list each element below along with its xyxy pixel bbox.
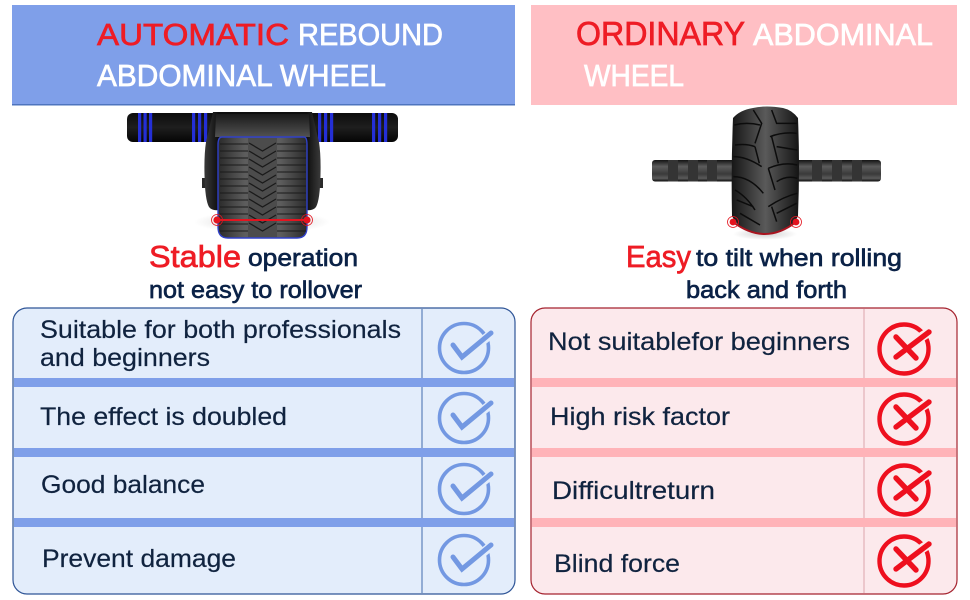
product image: automatic rebound wheel (127, 112, 398, 238)
caption: stable operation (149, 239, 362, 304)
icon: cross mark 1 (880, 324, 929, 374)
icon: cross mark 2 (880, 394, 929, 444)
header: ordinary abdominal wheel: ABDOMINAL (753, 17, 933, 52)
caption: easy to tilt: back and forth (686, 277, 847, 304)
row: prevent damage: Prevent damage (42, 545, 236, 573)
icon: check mark 1 (440, 324, 491, 372)
icon: check mark 3 (440, 464, 491, 514)
panel: automatic wheel benefits (13, 308, 515, 594)
row: difficult return: Difficultreturn (552, 477, 715, 505)
product image: ordinary wheel (652, 106, 881, 240)
caption: stable operation: not easy to rollover (149, 277, 362, 304)
caption: easy to tilt: Easy (626, 239, 691, 274)
side knobs (202, 178, 323, 188)
header: ordinary abdominal wheel: WHEEL (584, 58, 684, 93)
header: automatic rebound abdominal wheel: ABDOMINAL WHEEL (97, 58, 386, 93)
panel: ordinary wheel drawbacks (531, 308, 957, 594)
header: automatic rebound abdominal wheel: REBOUND (298, 17, 443, 52)
caption: easy to tilt (626, 239, 902, 304)
row: suitable for both (40, 316, 401, 372)
caption: easy to tilt: to tilt when rolling (696, 245, 902, 272)
row: the effect is doubled: The effect is doubled (40, 403, 287, 431)
row: suitable for both: Suitable for both professionals (40, 316, 401, 344)
caption: stable operation: operation (248, 245, 358, 272)
caption: stable operation: Stable (149, 239, 241, 274)
row: high risk factor: High risk factor (550, 403, 730, 431)
row: good balance: Good balance (41, 471, 205, 499)
header: ordinary abdominal wheel (531, 5, 957, 105)
header: automatic rebound abdominal wheel (12, 5, 515, 106)
row: blind force: Blind force (554, 550, 680, 578)
icon: cross mark 4 (880, 536, 929, 586)
row: suitable for both: and beginners (40, 344, 210, 372)
header: ordinary abdominal wheel: ORDINARY (576, 15, 745, 52)
icon: cross mark 3 (880, 466, 929, 514)
header: automatic rebound abdominal wheel: AUTOMATIC (97, 17, 289, 52)
icon: check mark 4 (440, 536, 491, 584)
row: not suitable for beginners: Not suitablefor beginners (548, 328, 850, 356)
icon: check mark 2 (440, 394, 491, 442)
